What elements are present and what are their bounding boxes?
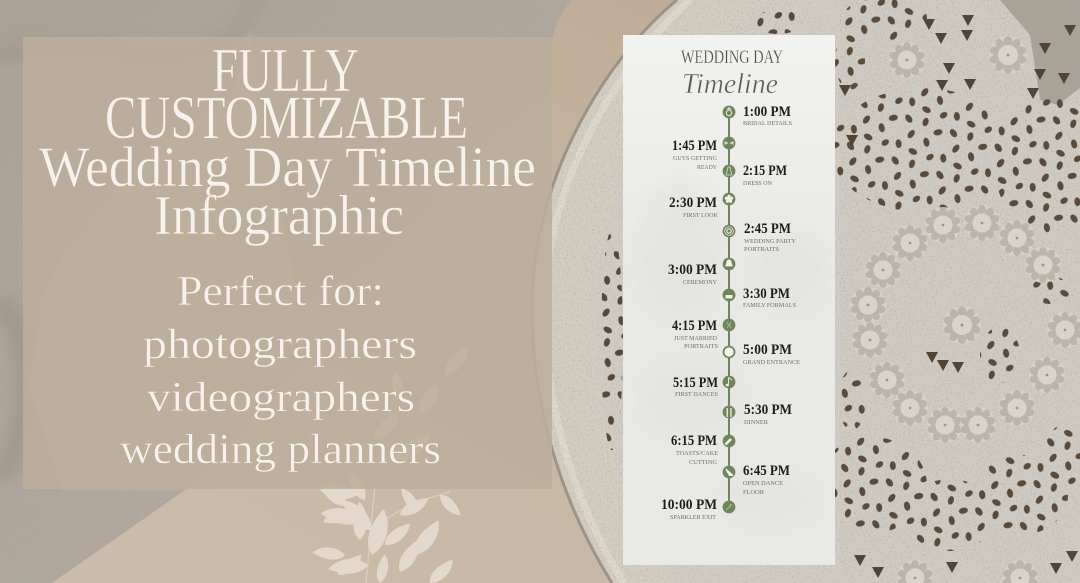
entry: 5:15 PM first dances: FIRST DANCES: [675, 392, 718, 398]
icon: music note: [728, 378, 732, 384]
entry: 5:15 PM first dances: [673, 375, 735, 398]
entry: 6:15 PM toasts and cake cutting: TOASTS/CAKE: [676, 451, 718, 457]
entry: 2:15 PM dress on: 2:15 PM: [743, 163, 787, 179]
entry: 2:45 PM wedding party portraits: PORTRAITS: [744, 247, 779, 253]
card watercolor wash: [638, 180, 825, 528]
entry: 1:45 PM guys getting ready: GUYS GETTING: [673, 156, 718, 162]
entry: 6:15 PM toasts and cake cutting: 6:15 PM: [671, 433, 717, 449]
entry: 6:45 PM open dance floor: OPEN DANCE: [743, 481, 783, 487]
entry: 10:00 PM sparkler exit: SPARKLER EXIT: [670, 515, 716, 521]
icon: bow tie: [724, 141, 734, 145]
lace triangles: [839, 15, 1078, 581]
translucent title panel: [23, 37, 552, 489]
entry: 5:00 PM grand entrance: [723, 342, 800, 366]
icon: dress: [726, 167, 732, 175]
timeline spine: [728, 112, 730, 507]
entry: 5:00 PM grand entrance: GRAND ENTRANCE: [743, 360, 800, 366]
icon: microphone: [726, 439, 731, 444]
entry: 1:00 PM bridal details: 1:00 PM: [743, 104, 791, 120]
icon: ring: [726, 108, 732, 116]
entry: 2:45 PM wedding party portraits: [723, 221, 797, 253]
icon: couple: [726, 322, 732, 328]
entry: 5:30 PM dinner: 5:30 PM: [744, 402, 792, 418]
icon: flower: [725, 195, 733, 203]
entry: 2:30 PM first look: FIRST LOOK: [683, 213, 719, 219]
icon: family portrait: [726, 295, 732, 298]
lace holes: [601, 0, 1080, 551]
entry: 4:15 PM just married portraits: [672, 318, 735, 350]
entry: 2:30 PM first look: [669, 193, 735, 219]
entry: 2:45 PM wedding party portraits: WEDDING PARTY: [744, 239, 797, 245]
heading: fully customizable wedding day timeline infographic: Wedding Day Timeline: [39, 136, 536, 199]
entry: 6:45 PM open dance floor: [723, 463, 790, 496]
entry: 5:30 PM dinner: DINNER: [744, 420, 768, 426]
background: pierced lace plate: [601, 0, 1080, 583]
entry: 5:15 PM first dances: 5:15 PM: [673, 375, 718, 391]
card title: WEDDING DAY: [681, 47, 783, 68]
icon: high heel: [726, 468, 733, 476]
subheading: perfect for list: photographers: [143, 322, 417, 368]
entry: 3:30 PM family formals: 3:30 PM: [743, 286, 790, 302]
subheading: perfect for list: videographers: [147, 375, 415, 421]
background: stone plate rim: [530, 0, 1080, 583]
entry: 3:30 PM family formals: [723, 286, 796, 309]
entry: 3:30 PM family formals: FAMILY FORMALS: [743, 303, 796, 309]
panel: timeline card: [623, 35, 835, 565]
entry: 2:30 PM first look: 2:30 PM: [669, 195, 717, 211]
subheading: perfect for list: wedding planners: [120, 427, 441, 473]
icon: camera: [725, 227, 733, 235]
entry: 4:15 PM just married portraits: JUST MARRIED: [674, 336, 718, 342]
subheading: perfect for list: [120, 269, 441, 473]
entry: 2:15 PM dress on: [723, 163, 787, 187]
entry: 4:15 PM just married portraits: PORTRAITS: [684, 344, 718, 350]
dried leaf sprig: [312, 346, 475, 583]
entry: 6:45 PM open dance floor: 6:45 PM: [743, 463, 790, 479]
entry: 3:00 PM ceremony: CEREMONY: [683, 280, 718, 286]
entry: 10:00 PM sparkler exit: [661, 497, 735, 521]
entry: 6:15 PM toasts and cake cutting: [671, 433, 735, 466]
icon: door: [724, 347, 734, 357]
lace shadow: grey star motif: [1000, 0, 1080, 105]
entry: 2:15 PM dress on: DRESS ON: [743, 181, 773, 187]
card script subtitle: Timeline: [682, 68, 778, 100]
entry: 1:45 PM guys getting ready: READY: [697, 165, 718, 171]
icon: fork and knife: [727, 408, 731, 417]
entry: 3:00 PM ceremony: [668, 258, 735, 286]
entry: 6:45 PM open dance floor: FLOOR: [743, 490, 764, 496]
entry: 2:45 PM wedding party portraits: 2:45 PM: [744, 221, 791, 237]
lace rosettes: [850, 36, 1080, 583]
entry: 4:15 PM just married portraits: 4:15 PM: [672, 318, 717, 334]
entry: 1:45 PM guys getting ready: [672, 137, 735, 171]
entry: 5:30 PM dinner: [723, 402, 792, 426]
subheading: perfect for list: Perfect for:: [177, 269, 384, 315]
icon: bell: [725, 260, 733, 266]
entry: 1:45 PM guys getting ready: 1:45 PM: [672, 138, 717, 154]
heading: fully customizable wedding day timeline infographic: [39, 37, 536, 247]
heading: fully customizable wedding day timeline infographic: CUSTOMIZABLE: [105, 85, 468, 152]
entry: 5:00 PM grand entrance: 5:00 PM: [743, 342, 792, 358]
entry: 10:00 PM sparkler exit: 10:00 PM: [661, 497, 717, 513]
entry: 1:00 PM bridal details: [723, 104, 792, 127]
heading: fully customizable wedding day timeline infographic: FULLY: [212, 37, 359, 105]
entry: 3:00 PM ceremony: 3:00 PM: [668, 262, 717, 278]
entry: 6:15 PM toasts and cake cutting: CUTTING: [689, 460, 718, 466]
entry: 1:00 PM bridal details: BRIDAL DETAILS: [743, 121, 792, 127]
heading: fully customizable wedding day timeline infographic: Infographic: [154, 185, 404, 247]
icon: sparkler: [726, 504, 733, 510]
background: linen and sheer fabric: [0, 0, 600, 583]
